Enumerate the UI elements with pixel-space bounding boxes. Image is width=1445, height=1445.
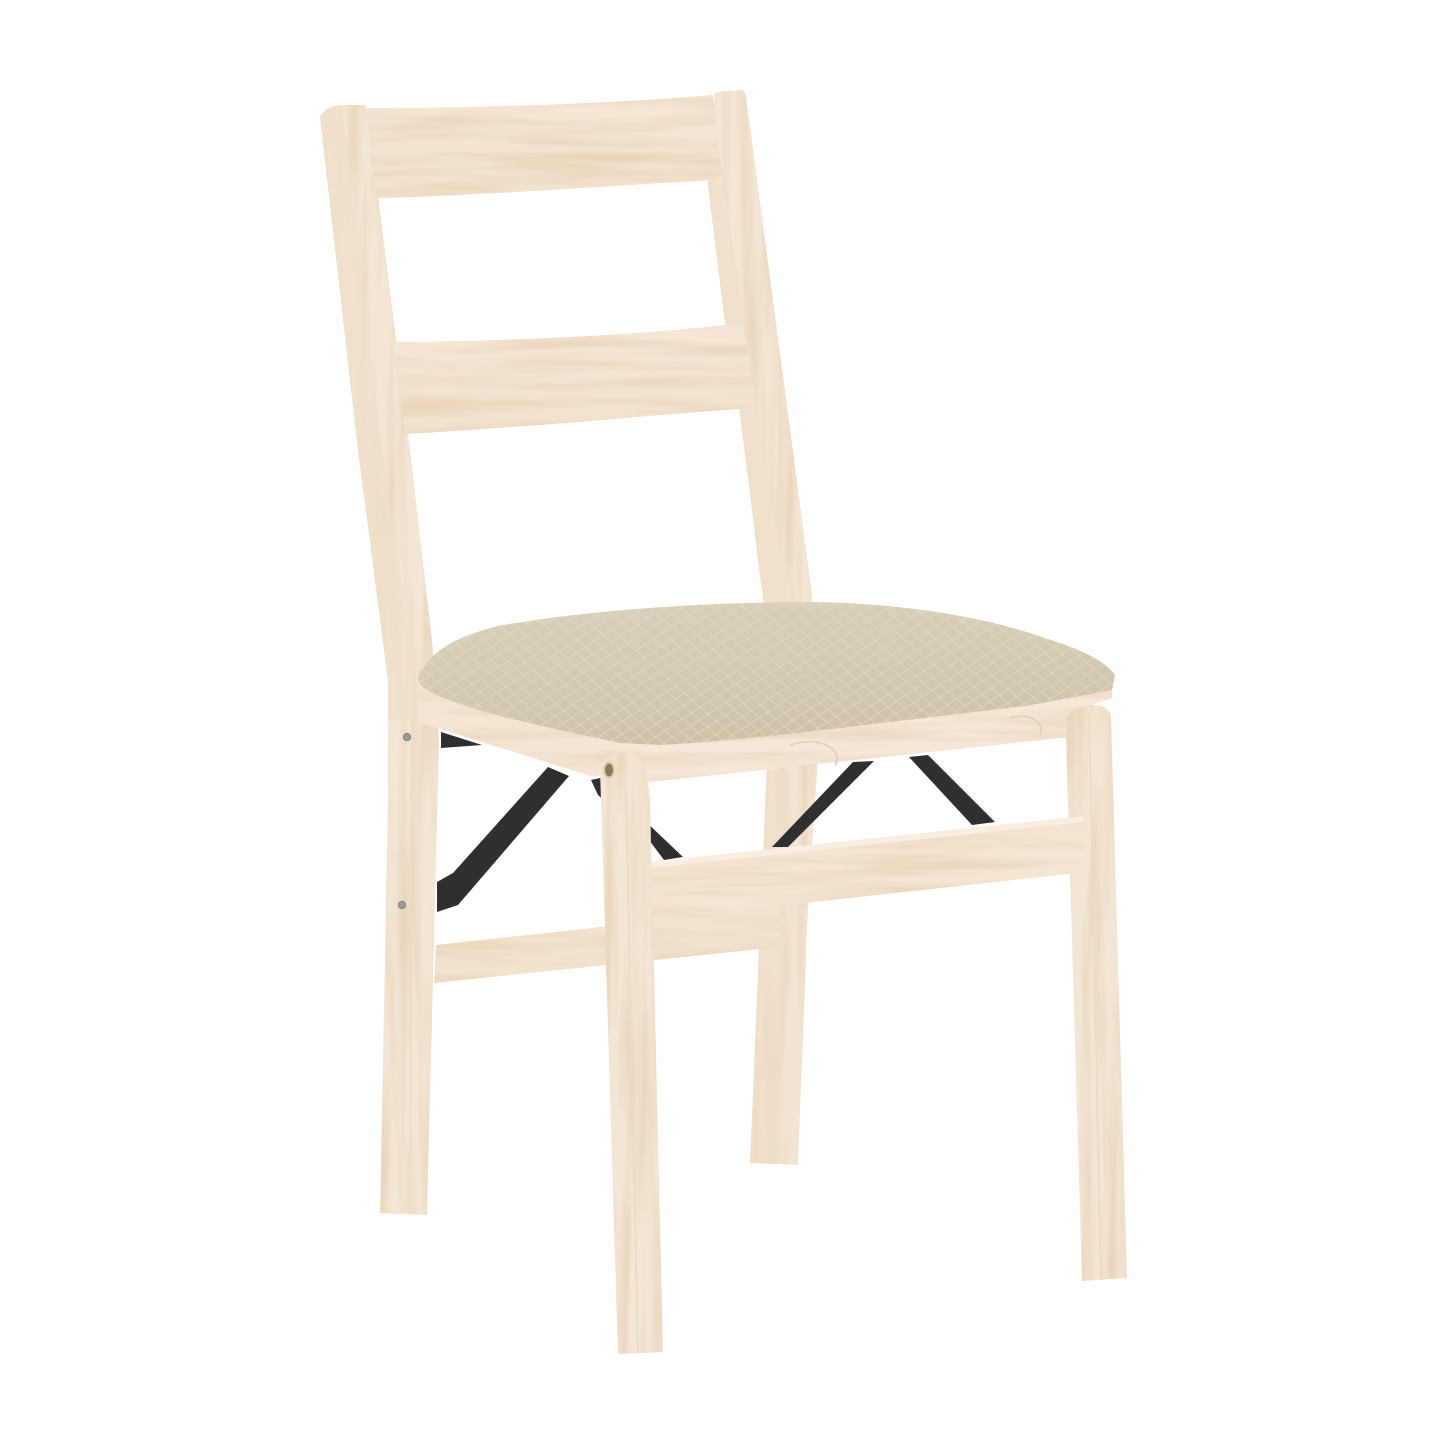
middle back slat — [393, 323, 755, 434]
front left leg — [600, 753, 663, 1354]
seat frame left rail — [418, 670, 660, 777]
seat frame front rail — [640, 680, 1112, 782]
front right leg — [1066, 705, 1127, 1281]
front stretcher — [650, 816, 1086, 920]
metal folding brackets — [437, 732, 995, 912]
illustration: wooden folding chair — [320, 90, 1127, 1354]
rear stretcher — [434, 905, 780, 983]
back right post — [708, 90, 812, 615]
back left post and rear leg — [320, 105, 439, 1215]
rear right leg — [750, 760, 818, 1165]
upholstered seat cushion — [418, 602, 1115, 745]
icon: upper screw — [403, 733, 411, 741]
top back slat — [366, 95, 722, 198]
icon: lower screw — [398, 901, 406, 909]
icon: pivot hole — [604, 762, 614, 778]
